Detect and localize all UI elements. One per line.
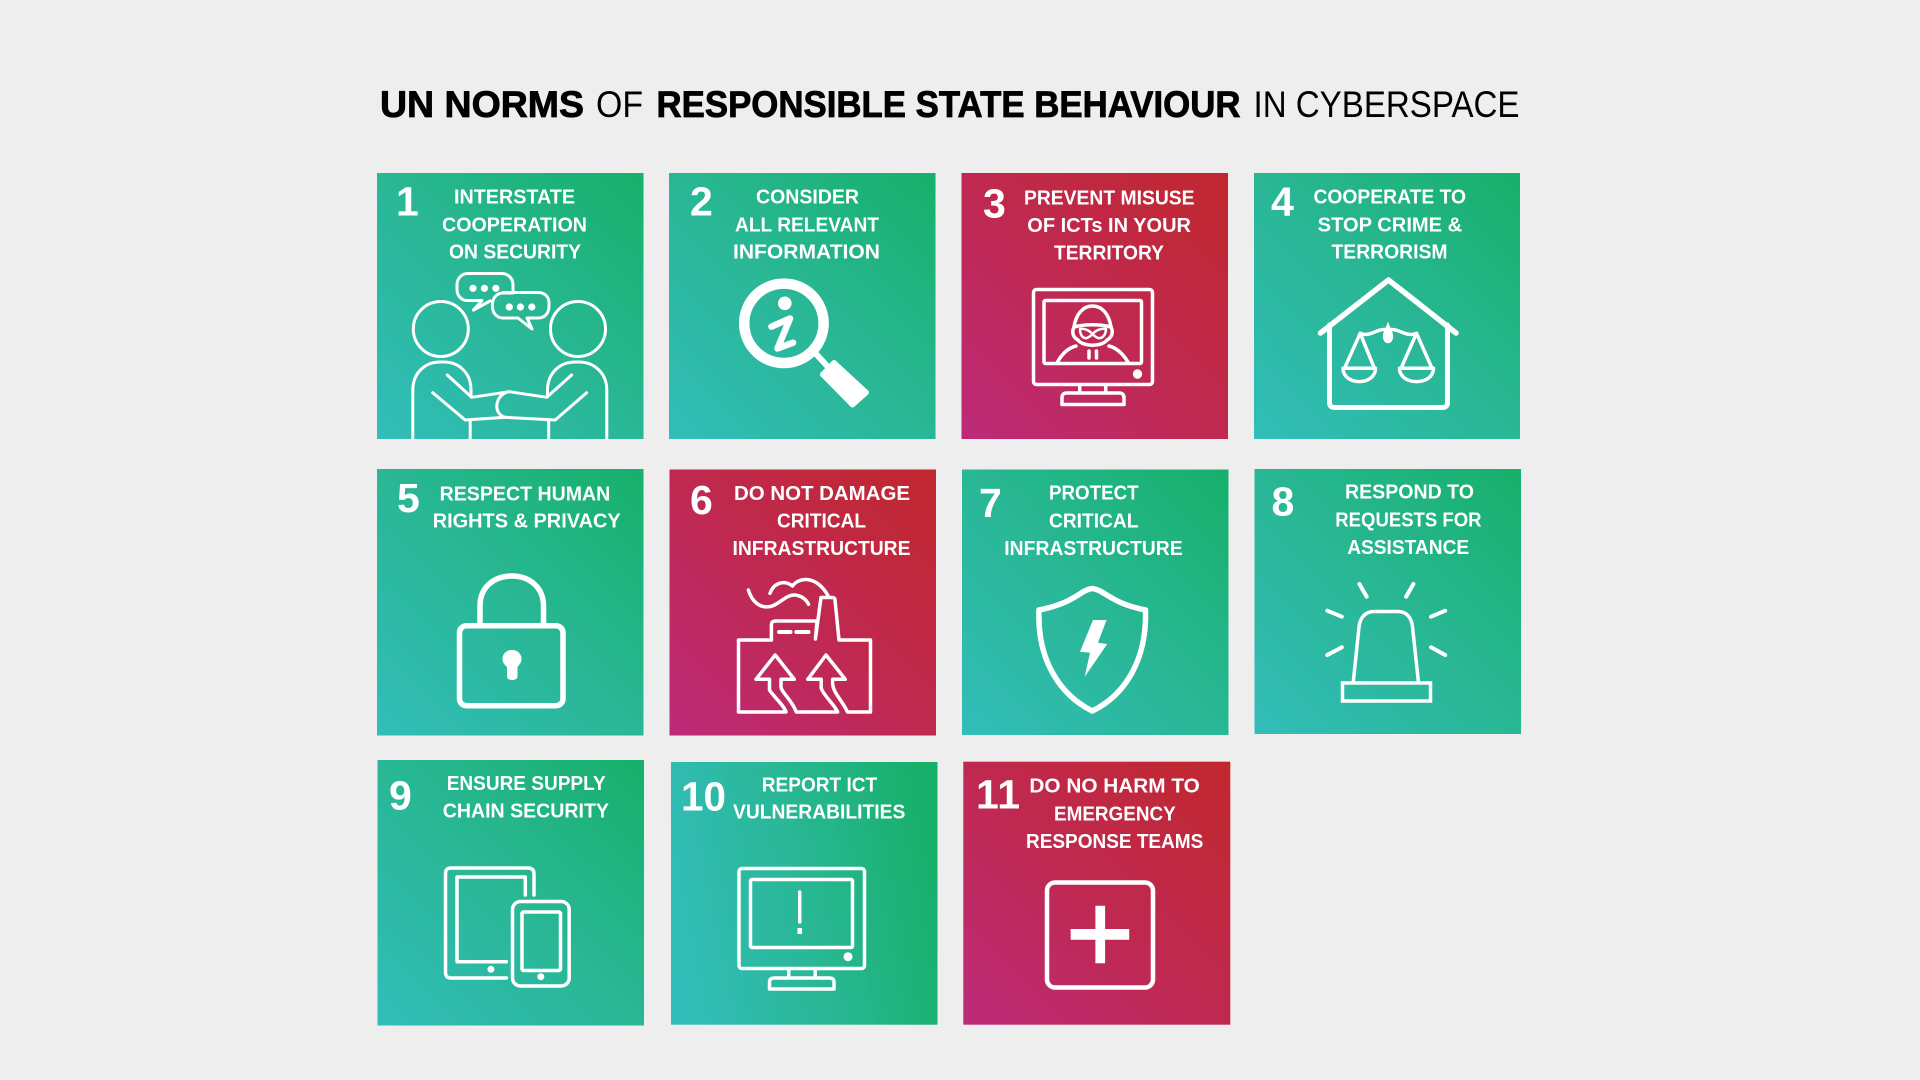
title bbox=[380, 84, 1520, 125]
heading: cooperate to stop crime and terrorism: STOP CRIME & bbox=[1318, 214, 1462, 236]
heading: ensure supply chain security: ENSURE SUPPLY bbox=[447, 773, 606, 795]
icon: magnifying glass with information sign bbox=[744, 284, 866, 405]
icon: damaged factory with rising arrows bbox=[738, 580, 870, 712]
number 11: 11 bbox=[976, 772, 1020, 818]
number 10: 10 bbox=[681, 774, 726, 820]
heading: do not damage critical infrastructure bbox=[732, 483, 910, 560]
title: IN CYBERSPACE bbox=[1254, 84, 1520, 125]
icon: padlock bbox=[460, 576, 563, 706]
heading: do not damage critical infrastructure: INFRASTRUCTURE bbox=[732, 538, 910, 560]
heading: cooperate to stop crime and terrorism bbox=[1314, 186, 1466, 263]
heading: interstate cooperation on security: COOPERATION bbox=[442, 214, 587, 236]
panel: norm 2 consider all relevant information bbox=[669, 173, 936, 439]
title: OF bbox=[596, 84, 643, 125]
heading: respect human rights and privacy bbox=[433, 483, 621, 533]
icon: tablet and smartphone bbox=[446, 868, 569, 986]
heading: do no harm to emergency response teams: DO NO HARM TO bbox=[1029, 776, 1200, 798]
number 9: 9 bbox=[389, 772, 412, 818]
heading: do not damage critical infrastructure: DO NOT DAMAGE bbox=[734, 483, 910, 505]
heading: prevent misuse of ICTs in your territory bbox=[1024, 188, 1194, 265]
heading: interstate cooperation on security bbox=[442, 186, 587, 263]
heading: do no harm to emergency response teams: RESPONSE TEAMS bbox=[1026, 831, 1203, 853]
heading: interstate cooperation on security: INTERSTATE bbox=[454, 186, 575, 208]
heading: protect critical infrastructure: CRITICAL bbox=[1049, 510, 1138, 532]
icon: two people shaking hands with speech bubbles bbox=[413, 274, 607, 439]
icon: emergency beacon light bbox=[1327, 584, 1445, 701]
number 6: 6 bbox=[690, 477, 713, 523]
heading: respect human rights and privacy: RESPECT HUMAN bbox=[440, 483, 610, 505]
panel: norm 5 respect human rights and privacy bbox=[377, 469, 644, 736]
number 3: 3 bbox=[983, 180, 1006, 226]
icon: shield with lightning bolt bbox=[1039, 588, 1146, 711]
heading: protect critical infrastructure bbox=[1004, 483, 1183, 560]
heading: cooperate to stop crime and terrorism: TERRORISM bbox=[1332, 241, 1448, 263]
heading: report ICT vulnerabilities: VULNERABILITIES bbox=[733, 802, 905, 824]
heading: prevent misuse of ICTs in your territory: TERRITORY bbox=[1054, 243, 1165, 265]
panel: norm 10 report ICT vulnerabilities bbox=[671, 762, 938, 1025]
heading: do no harm to emergency response teams: EMERGENCY bbox=[1054, 803, 1176, 825]
heading: consider all relevant information: INFORMATION bbox=[733, 241, 880, 263]
heading: do not damage critical infrastructure: CRITICAL bbox=[777, 510, 866, 532]
heading: consider all relevant information: CONSIDER bbox=[756, 186, 860, 208]
number 2: 2 bbox=[690, 178, 713, 224]
heading: do no harm to emergency response teams bbox=[1026, 776, 1203, 853]
heading: ensure supply chain security: CHAIN SECURITY bbox=[443, 800, 610, 822]
number 8: 8 bbox=[1272, 478, 1294, 524]
number 5: 5 bbox=[397, 475, 420, 521]
icon: monitor with exclamation mark bbox=[739, 868, 864, 989]
heading: respond to requests for assistance: ASSISTANCE bbox=[1347, 537, 1469, 559]
heading: respond to requests for assistance: REQUESTS FOR bbox=[1335, 509, 1482, 531]
number 1: 1 bbox=[396, 178, 419, 224]
heading: respond to requests for assistance bbox=[1335, 482, 1482, 559]
heading: prevent misuse of ICTs in your territory: OF ICTs IN YOUR bbox=[1027, 215, 1192, 237]
panel: norm 1 interstate cooperation bbox=[377, 173, 644, 439]
icon: house with scales of justice bbox=[1320, 280, 1456, 408]
panel: norm 9 ensure supply chain security bbox=[378, 760, 644, 1026]
heading: respect human rights and privacy: RIGHTS & PRIVACY bbox=[433, 511, 621, 533]
title: UN NORMS bbox=[380, 84, 584, 125]
heading: consider all relevant information: ALL RELEVANT bbox=[735, 214, 879, 236]
panel: norm 8 respond to requests for assistance bbox=[1254, 469, 1521, 734]
panel: norm 11 do no harm to emergency response teams bbox=[963, 762, 1230, 1025]
heading: protect critical infrastructure: INFRASTRUCTURE bbox=[1004, 538, 1183, 560]
heading: protect critical infrastructure: PROTECT bbox=[1049, 483, 1139, 505]
icon: hacker on computer monitor bbox=[1034, 290, 1152, 404]
icon: first aid cross bbox=[1047, 882, 1153, 988]
heading: ensure supply chain security bbox=[443, 773, 610, 822]
number 7: 7 bbox=[979, 480, 1002, 526]
panel: norm 4 cooperate to stop crime and terrorism bbox=[1254, 173, 1520, 439]
number 4: 4 bbox=[1271, 178, 1294, 224]
heading: cooperate to stop crime and terrorism: COOPERATE TO bbox=[1314, 186, 1466, 208]
heading: report ICT vulnerabilities bbox=[733, 774, 905, 824]
panel: norm 3 prevent misuse of ICTs bbox=[962, 173, 1228, 439]
panel: norm 7 protect critical infrastructure bbox=[962, 470, 1228, 735]
heading: report ICT vulnerabilities: REPORT ICT bbox=[762, 774, 877, 796]
heading: consider all relevant information bbox=[733, 186, 880, 263]
heading: prevent misuse of ICTs in your territory: PREVENT MISUSE bbox=[1024, 188, 1194, 210]
heading: interstate cooperation on security: ON SECURITY bbox=[449, 241, 582, 263]
heading: respond to requests for assistance: RESPOND TO bbox=[1345, 482, 1474, 504]
title: RESPONSIBLE STATE BEHAVIOUR bbox=[656, 84, 1240, 125]
panel: norm 6 do not damage critical infrastructure bbox=[670, 470, 936, 736]
